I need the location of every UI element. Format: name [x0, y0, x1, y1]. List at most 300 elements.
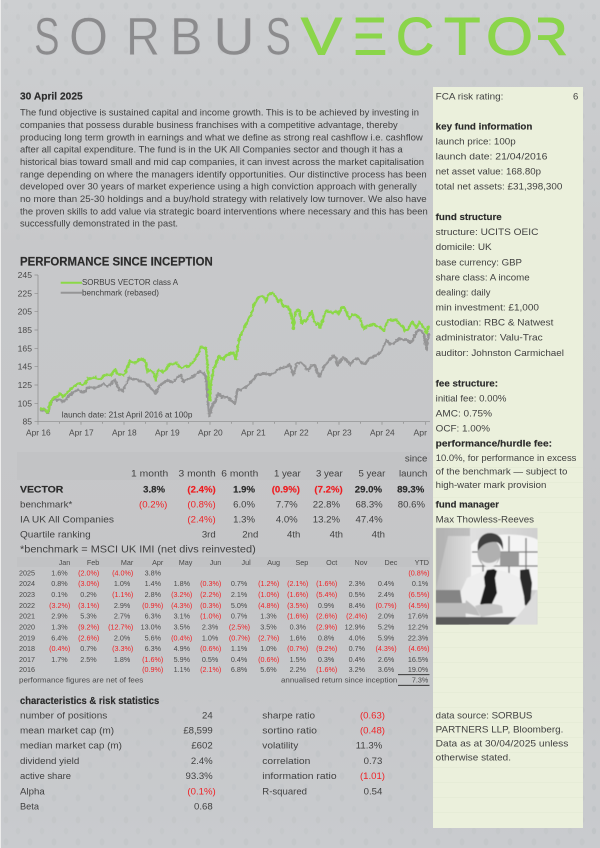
table header: 3 month	[178, 469, 216, 480]
table header: 1 month	[131, 469, 168, 480]
chart axes: Apr 16	[26, 428, 51, 438]
row: VECTOR: (0.9%)	[272, 484, 300, 495]
launch date note: launch date: 21st April 2016 at 100p	[62, 410, 193, 420]
year 2022: 0.9%	[318, 601, 335, 610]
year 2025: 3.8%	[145, 568, 162, 577]
fee structure: initial fee: 0.00%	[436, 394, 507, 405]
year 2022: (3.1%)	[78, 601, 99, 610]
year 2018: 1.0%	[260, 644, 277, 653]
table header: 1 year	[274, 469, 301, 480]
year 2022: (3.2%)	[49, 601, 70, 610]
year 2023: (1.1%)	[112, 590, 133, 599]
year 2022: (0.9%)	[142, 601, 163, 610]
row: VECTOR	[20, 484, 425, 495]
fund structure: structure: UCITS OEIC	[436, 227, 539, 238]
row: IA UK All Companies	[20, 514, 383, 525]
year 2020: (12.7%)	[108, 622, 133, 631]
row: VECTOR: VECTOR	[20, 484, 63, 495]
year 2020: 2.3%	[202, 622, 219, 631]
year 2019: (2.7%)	[258, 633, 279, 642]
year 2020: 5.2%	[378, 622, 395, 631]
year 2023: 0.1%	[51, 590, 68, 599]
monthly header: Feb	[87, 558, 99, 567]
year 2016	[19, 665, 429, 674]
fund manager	[436, 499, 534, 525]
risk statistics: (1.01)	[360, 771, 385, 782]
year 2018: 4.9%	[174, 644, 191, 653]
year 2023: 2.1%	[231, 590, 248, 599]
year 2020: 13.0%	[141, 622, 162, 631]
chart axes: Apr	[414, 428, 427, 438]
year 2019: 2.0%	[114, 633, 131, 642]
year 2023: (3.2%)	[171, 590, 192, 599]
year 2020: (9.2%)	[78, 622, 99, 631]
year 2016: 5.6%	[260, 665, 277, 674]
monthly header: Jan	[59, 558, 70, 567]
fund structure: fund structure	[436, 212, 502, 223]
monthly header	[59, 558, 429, 567]
year 2024: (2.1%)	[287, 579, 308, 588]
year 2021: 2.9%	[51, 612, 68, 621]
table header: 6 month	[221, 469, 258, 480]
year 2021: 5.3%	[80, 612, 97, 621]
FCA risk rating: FCA risk rating:	[436, 91, 503, 102]
logo: Sorbus Vector: S	[266, 7, 291, 66]
risk statistics: (0.63)	[360, 710, 385, 721]
year 2021: 2.0%	[378, 612, 395, 621]
chart axes: Apr 24	[370, 428, 395, 438]
year 2023: 2.4%	[378, 590, 395, 599]
year 2022: (0.7%)	[376, 601, 397, 610]
year 2021: 3.1%	[174, 612, 191, 621]
data source note	[436, 710, 569, 764]
monthly table footer	[19, 675, 430, 685]
fund objective text	[20, 108, 428, 230]
year 2017: 0.3%	[318, 655, 335, 664]
year 2024: 1.8%	[174, 579, 191, 588]
characteristics statistics: 0.68	[194, 801, 213, 812]
fund structure: share class: A income	[436, 272, 530, 284]
year 2025: (2.0%)	[78, 568, 99, 577]
year 2017: 1.5%	[290, 655, 307, 664]
characteristics statistics: mean market cap (m)	[20, 726, 114, 737]
risk statistics: 11.3%	[356, 741, 383, 752]
risk statistics: correlation	[262, 756, 310, 767]
data source note: otherwise stated.	[436, 753, 511, 764]
risk statistics: 0.73	[364, 756, 382, 767]
year 2019: 5.6%	[145, 633, 162, 642]
fund structure	[436, 212, 564, 359]
year 2016: 2016	[19, 665, 35, 674]
year 2016: 2.2%	[290, 665, 307, 674]
key fund information: net asset value: 168.80p	[436, 166, 541, 178]
year 2019: 1.6%	[290, 633, 307, 642]
row: quartile ranking: 2nd	[242, 529, 258, 540]
year 2021: 17.6%	[408, 612, 429, 621]
risk statistics: R-squared	[262, 786, 307, 797]
chart axes: Apr 18	[112, 428, 137, 438]
year 2018: 6.3%	[145, 644, 162, 653]
logo: Sorbus Vector: C	[396, 7, 434, 66]
fund structure: dealing: daily	[436, 288, 491, 298]
year 2019: 5.9%	[378, 633, 395, 642]
risk statistics	[262, 710, 385, 797]
row: IA UK All Companies: (2.4%)	[187, 514, 216, 525]
fund structure: domicile: UK	[436, 242, 492, 253]
performance fee: of the benchmark — subject to	[436, 466, 567, 477]
fund structure: min investment: £1,000	[436, 302, 539, 314]
monthly header: May	[179, 558, 193, 567]
performance heading: PERFORMANCE SINCE INCEPTION	[20, 257, 213, 269]
characteristics statistics: number of positions	[20, 710, 108, 721]
row: IA UK All Companies: 1.3%	[233, 514, 255, 525]
year 2017: 5.9%	[174, 655, 191, 664]
year 2016: 3.2%	[349, 665, 366, 674]
year 2018: (4.3%)	[376, 644, 397, 653]
monthly header: Oct	[326, 558, 337, 567]
monthly header: Apr	[152, 558, 164, 567]
row: benchmark: (0.2%)	[139, 499, 167, 510]
logo: Sorbus Vector: T	[444, 7, 480, 66]
year 2017: 2.6%	[378, 655, 395, 664]
year 2021: (1.0%)	[200, 612, 221, 621]
row: VECTOR: 29.0%	[355, 484, 382, 495]
year 2018: (4.6%)	[408, 644, 430, 653]
year 2020: 2020	[19, 622, 35, 631]
fund manager: Max Thowless-Reeves	[436, 514, 534, 525]
year 2019: (2.6%)	[78, 633, 99, 642]
year 2024: 0.4%	[378, 579, 395, 588]
chart axes: Apr 19	[155, 428, 180, 438]
year 2022: 8.4%	[349, 601, 366, 610]
logo: Sorbus Vector: V	[301, 7, 342, 66]
year 2024: 0.1%	[412, 579, 429, 588]
year 2023: 0.2%	[80, 590, 97, 599]
year 2020: 3.5%	[174, 622, 191, 631]
year 2020: 0.3%	[290, 622, 307, 631]
fee structure	[436, 379, 507, 435]
year 2024: (1.6%)	[316, 579, 337, 588]
table header: launch	[399, 469, 427, 480]
year 2025: 2025	[19, 568, 35, 577]
year 2023: 2.8%	[145, 590, 162, 599]
year 2016: (1.6%)	[316, 665, 337, 674]
panel: fund information sidebar	[433, 87, 583, 828]
year 2016: 3.6%	[378, 665, 395, 674]
year 2024: (1.2%)	[258, 579, 279, 588]
year 2023: (1.0%)	[258, 590, 279, 599]
year 2023: (5.4%)	[316, 590, 337, 599]
year 2025	[19, 568, 430, 577]
year 2024: 2024	[19, 579, 35, 588]
chart axes: 105	[18, 398, 32, 408]
chart legend	[61, 277, 178, 297]
monthly table footer: annualised return since inception	[281, 676, 397, 685]
monthly header: Jul	[241, 558, 251, 567]
monthly table footer: performance figures are net of fees	[19, 676, 144, 685]
year 2019: 1.0%	[202, 633, 219, 642]
year 2022: 5.0%	[231, 601, 248, 610]
photo: fund manager portrait	[436, 528, 538, 629]
year 2022: (0.3%)	[200, 601, 221, 610]
performance fee: 10.0%, for performance in excess	[436, 453, 577, 464]
year 2025: 1.6%	[51, 568, 68, 577]
row: quartile ranking	[20, 529, 385, 540]
benchmark footnote: *benchmark = MSCI UK IMI (net divs reinvested)	[20, 544, 256, 555]
year 2017: 0.4%	[231, 655, 248, 664]
table header	[131, 454, 427, 480]
year 2020: 3.5%	[260, 622, 277, 631]
chart legend: benchmark (rebased)	[82, 287, 159, 297]
fee structure: fee structure:	[436, 379, 498, 390]
year 2020: 12.2%	[408, 622, 429, 631]
fund manager: fund manager	[436, 499, 499, 510]
year 2019: (0.4%)	[171, 633, 192, 642]
year 2024: 1.0%	[114, 579, 131, 588]
year 2021: 2.7%	[114, 612, 131, 621]
logo: Sorbus Vector: O	[69, 7, 108, 66]
year 2017	[19, 655, 429, 664]
row: IA UK All Companies: 4.0%	[276, 514, 298, 525]
key fund information: launch date: 21/04/2016	[436, 151, 547, 162]
row: IA UK All Companies: 13.2%	[313, 514, 340, 525]
year 2023: 0.5%	[349, 590, 366, 599]
characteristics statistics: 2.4%	[191, 756, 213, 767]
fund objective text: the proven skills to add value via strategic board interventions where necessary and this has been	[20, 206, 428, 217]
row: benchmark: 7.7%	[276, 499, 298, 510]
year 2019: 2019	[19, 633, 35, 642]
key fund information: total net assets: £31,398,300	[436, 181, 562, 192]
year 2021: 0.7%	[231, 612, 248, 621]
fund objective text: successfully demonstrated in the past.	[20, 219, 178, 230]
chart axes: Apr 17	[69, 428, 94, 438]
chart axes: 145	[18, 362, 32, 372]
year 2020: (2.9%)	[316, 622, 337, 631]
year 2018: (0.4%)	[49, 644, 70, 653]
year 2016: (2.1%)	[200, 665, 221, 674]
fund structure: base currency: GBP	[436, 257, 522, 268]
row: IA UK All Companies: 47.4%	[355, 514, 383, 525]
row: benchmark: benchmark*	[20, 499, 73, 510]
year 2018: (0.6%)	[200, 644, 221, 653]
logo: Sorbus Vector: U	[213, 7, 255, 66]
characteristics statistics: £602	[191, 741, 213, 752]
year 2021	[19, 612, 429, 621]
row: benchmark	[20, 499, 425, 510]
row: quartile ranking: 4th	[330, 529, 343, 540]
year 2018: 0.7%	[80, 644, 97, 653]
year 2020: 12.9%	[345, 622, 366, 631]
characteristics statistics: dividend yield	[20, 756, 79, 767]
monthly table footer: 7.3%	[412, 676, 429, 685]
fund objective text: developed over 30 years of market experience using a high conviction approach with generally	[20, 182, 417, 193]
fund structure: custodian: RBC & Natwest	[436, 318, 554, 328]
year 2016: 19.0%	[408, 665, 429, 674]
chart axes	[18, 270, 430, 438]
year 2018	[19, 644, 430, 653]
year 2018: (0.7%)	[287, 644, 308, 653]
line chart: performance since inception	[18, 270, 430, 438]
data source note: PARTNERS LLP, Bloomberg.	[436, 724, 563, 735]
fund objective text: producing long term growth in earnings and what we define as strong real cashflow i.e. cashflow	[20, 132, 423, 143]
year 2018: (9.2%)	[316, 644, 337, 653]
chart axes: 185	[18, 325, 32, 335]
year 2024	[19, 579, 429, 588]
year 2019: 0.8%	[318, 633, 335, 642]
table header: since	[405, 454, 427, 465]
fund objective text: no more than 25-30 holdings and a buy/hold strategy with relatively low turnover. We also have	[20, 194, 427, 205]
year 2022: (4.8%)	[258, 601, 279, 610]
monthly returns table	[17, 557, 430, 685]
logo: Sorbus Vector: B	[170, 7, 202, 66]
fund objective text: historical bias toward small and mid cap companies, it can invest across the market capitalisation	[20, 157, 424, 168]
year 2024: 1.4%	[145, 579, 162, 588]
chart axes: Apr 22	[284, 428, 309, 438]
year 2017: 16.5%	[408, 655, 429, 664]
year 2017: 0.5%	[202, 655, 219, 664]
year 2022: (4.5%)	[408, 601, 430, 610]
year 2025: (0.8%)	[408, 568, 430, 577]
year 2020: (2.5%)	[229, 622, 250, 631]
year 2021: (2.6%)	[316, 612, 337, 621]
year 2019: 4.0%	[349, 633, 366, 642]
characteristics statistics: Beta	[20, 801, 40, 812]
row: quartile ranking: 3rd	[202, 529, 216, 540]
year 2018: 2018	[19, 644, 35, 653]
table header: 3 year	[316, 469, 343, 480]
performance table	[17, 452, 430, 555]
chart axes: 245	[18, 270, 32, 280]
key fund information: key fund information	[436, 121, 533, 132]
logo: Sorbus Vector: O	[486, 7, 533, 66]
performance fee	[436, 439, 577, 491]
fund objective text: companies that possess durable business franchises with a competitive advantage, thereby	[20, 120, 398, 131]
data source note: data source: SORBUS	[436, 710, 532, 721]
logo: Sorbus Vector: S	[34, 7, 60, 66]
chart legend: SORBUS VECTOR class A	[82, 277, 178, 287]
year 2021: 6.3%	[145, 612, 162, 621]
year 2017: (0.6%)	[258, 655, 279, 664]
fee structure: AMC: 0.75%	[436, 409, 493, 420]
year 2024: 0.7%	[231, 579, 248, 588]
year 2021: 1.3%	[260, 612, 277, 621]
series: SORBUS VECTOR class A	[40, 293, 428, 412]
row: quartile ranking: 4th	[372, 529, 385, 540]
year 2023: (2.2%)	[200, 590, 221, 599]
year 2016: 1.1%	[174, 665, 191, 674]
monthly header: Jun	[210, 558, 221, 567]
year 2024: (0.3%)	[200, 579, 221, 588]
characteristics statistics: Alpha	[20, 786, 45, 797]
year 2021: (1.6%)	[287, 612, 308, 621]
characteristics statistics: median market cap (m)	[20, 741, 122, 752]
year 2020	[19, 622, 429, 631]
performance fee: performance/hurdle fee:	[436, 439, 552, 450]
year 2016: (0.9%)	[142, 665, 163, 674]
row: benchmark: (0.8%)	[187, 499, 216, 510]
characteristics heading: characteristics & risk statistics	[20, 695, 159, 707]
fund objective text: after all capital expenditure. The fund is in the UK All Companies sector and though it has a	[20, 145, 403, 156]
year 2016: 6.8%	[231, 665, 248, 674]
year 2025: (4.0%)	[112, 568, 133, 577]
year 2020: 1.3%	[51, 622, 68, 631]
year 2022: (3.5%)	[287, 601, 308, 610]
characteristics statistics	[20, 710, 216, 812]
chart axes: 125	[18, 380, 32, 390]
row: VECTOR: (2.4%)	[187, 484, 216, 495]
date heading: 30 April 2025	[20, 91, 83, 102]
row: benchmark: 6.0%	[233, 499, 255, 510]
year 2022: 2022	[19, 601, 35, 610]
fund objective text: range depending on where the managers identify opportunities. Our distinctive process has been	[20, 169, 427, 180]
chart axes: Apr 21	[241, 428, 266, 438]
risk statistics: sortino ratio	[262, 726, 317, 737]
row: VECTOR: 3.8%	[143, 484, 165, 495]
risk statistics: volatility	[262, 741, 299, 752]
chart axes: Apr 20	[198, 428, 223, 438]
year 2018: 1.1%	[231, 644, 248, 653]
table header: 5 year	[358, 469, 386, 480]
row: benchmark: 80.6%	[398, 499, 425, 510]
characteristics statistics: 24	[202, 710, 213, 721]
chart axes: 85	[22, 417, 32, 427]
year 2017: (1.6%)	[142, 655, 163, 664]
year 2022: (4.3%)	[171, 601, 192, 610]
risk statistics: sharpe ratio	[262, 710, 315, 721]
year 2018: (3.3%)	[112, 644, 133, 653]
key fund information	[436, 121, 562, 192]
risk statistics: 0.54	[364, 786, 383, 797]
year 2017: 0.4%	[349, 655, 366, 664]
year 2023: (6.5%)	[408, 590, 430, 599]
performance fee: high-water mark provision	[436, 480, 546, 491]
row: benchmark: 68.3%	[355, 499, 383, 510]
key fund information: launch price: 100p	[436, 136, 516, 147]
year 2022: 2.9%	[114, 601, 131, 610]
characteristics statistics: (0.1%)	[187, 786, 216, 797]
monthly header: Aug	[267, 558, 280, 567]
year 2019: (0.7%)	[229, 633, 250, 642]
chart axes: Apr 23	[327, 428, 352, 438]
year 2018: 0.7%	[349, 644, 366, 653]
row: IA UK All Companies: IA UK All Companies	[20, 514, 114, 525]
fee structure: OCF: 1.00%	[436, 424, 491, 435]
fund structure: auditor: Johnston Carmichael	[436, 348, 564, 359]
monthly header: YTD	[415, 558, 429, 567]
year 2022	[19, 601, 430, 610]
year 2024: 2.3%	[349, 579, 366, 588]
logo: Sorbus Vector: R	[526, 7, 568, 66]
monthly header: Nov	[355, 558, 368, 567]
year 2017: 2017	[19, 655, 35, 664]
row: quartile ranking: Quartile ranking	[20, 529, 91, 540]
year 2023	[19, 590, 430, 599]
data source note: Data as at 30/04/2025 unless	[436, 739, 569, 750]
year 2019: 22.3%	[408, 633, 429, 642]
characteristics statistics: active share	[20, 771, 71, 782]
chart axes: 225	[18, 288, 32, 298]
year 2023: (1.6%)	[287, 590, 308, 599]
year 2021: 2021	[19, 612, 35, 621]
logo: Sorbus Vector: E	[343, 7, 388, 66]
year 2024: 0.8%	[51, 579, 68, 588]
year 2021: (2.4%)	[346, 612, 367, 621]
row: VECTOR: 89.3%	[397, 484, 425, 495]
chart axes: 165	[18, 343, 32, 353]
FCA risk rating: 6	[573, 91, 578, 102]
year 2017: 2.5%	[80, 655, 97, 664]
chart axes: 205	[18, 307, 32, 317]
